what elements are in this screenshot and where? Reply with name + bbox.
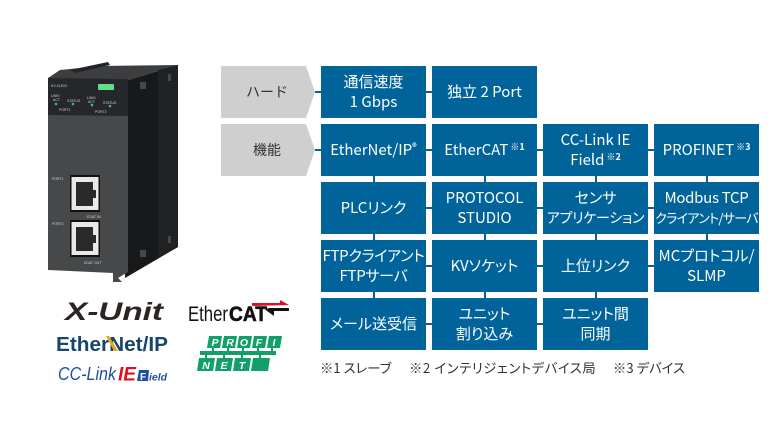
box: Modbus TCP (654, 182, 759, 234)
box: unit interrupt: 割り込み (456, 323, 513, 344)
logo: PROFINET: O (240, 337, 248, 349)
logo: EtherNet/IP: EtherNet/IP (56, 333, 168, 356)
box: mail send and receive: メール送受信 (330, 313, 417, 334)
box: PROTOCOL STUDIO: PROTOCOL (446, 187, 523, 208)
category arrow: hardware (221, 66, 315, 118)
logo: PROFINET: E (220, 360, 228, 372)
box: PLC link: PLCリンク (341, 197, 406, 218)
product photo: X-Unit module: ACT (88, 100, 96, 104)
box: Modbus TCP: クライアント/サーバ (655, 208, 758, 227)
box: inter-unit sync: 同期 (580, 323, 610, 344)
box: communication speed: 通信速度 (343, 71, 404, 92)
box: inter-unit sync: ユニット間 (562, 303, 629, 324)
box: PLC link (321, 182, 426, 234)
box: host link: 上位リンク (561, 255, 630, 276)
product photo: X-Unit module: STATUS (103, 101, 117, 105)
logo: CC-Link IE Field: F (140, 372, 146, 383)
logo: CC-Link IE Field: CC-Link (58, 363, 118, 384)
box: host link (543, 240, 648, 292)
product photo: X-Unit module: EDAT IN (87, 215, 101, 219)
logo: CC-Link IE Field: ield (149, 372, 168, 384)
logo: EtherCAT (188, 300, 289, 324)
logo: PROFINET: P (211, 337, 219, 349)
box: sensor application: センサ (575, 187, 616, 208)
box: CC-Link IE Field: CC-Link IE (561, 129, 630, 150)
box: Modbus TCP: Modbus TCP (664, 187, 748, 208)
box: PROTOCOL STUDIO (432, 182, 537, 234)
footnote: ※3 デバイス (613, 358, 685, 377)
footnote: ※2 インテリジェントデバイス局 (409, 358, 596, 377)
product photo: X-Unit module: PORT1 (59, 108, 71, 112)
box: KV socket (432, 240, 537, 292)
box: independent 2 port (432, 66, 537, 118)
logo: PROFINET: T (239, 360, 247, 372)
box: independent 2 port: 独立 2 Port (447, 81, 522, 102)
product photo: X-Unit module: LINK/ (51, 94, 60, 98)
box: PROFINET (654, 124, 759, 176)
box: communication speed (321, 66, 426, 118)
footnote (320, 358, 685, 377)
box: FTP client and server (321, 240, 426, 292)
footnote: ※1 スレーブ (320, 358, 391, 377)
product photo: X-Unit module (48, 62, 178, 282)
product photo: X-Unit module: PORT2 (95, 110, 107, 114)
box: unit interrupt (432, 298, 537, 350)
box: KV socket: KVソケット (451, 255, 518, 276)
product photo: X-Unit module: EDAT OUT (84, 261, 102, 265)
product photo: X-Unit module: LINK/ (87, 96, 96, 100)
logo: PROFINET: F (256, 337, 263, 349)
product photo: X-Unit module: ACT (53, 98, 61, 102)
box: communication speed: 1 Gbps (350, 91, 397, 112)
box: EtherNet/IP (321, 124, 426, 176)
logo: PROFINET: I (273, 337, 277, 349)
category arrow: functions (221, 124, 315, 176)
product photo: X-Unit module: STATUS (67, 99, 81, 103)
logo: CC-Link IE Field (58, 363, 168, 384)
box: MC protocol / SLMP: SLMP (687, 265, 726, 286)
box: sensor application: アプリケーション (547, 208, 644, 228)
box: unit interrupt: ユニット (459, 303, 510, 324)
box: PROFINET: PROFINET※3 (663, 139, 750, 160)
box: inter-unit sync (543, 298, 648, 350)
box: MC protocol / SLMP: MCプロトコル/ (659, 245, 754, 266)
box: FTP client and server: FTPサーバ (340, 265, 407, 286)
logo: X-Unit: X-Unit (62, 298, 165, 326)
category arrow: hardware: ハード (246, 82, 288, 102)
box: CC-Link IE Field (543, 124, 648, 176)
box: EtherCAT: EtherCAT※1 (444, 139, 525, 160)
category arrow: functions: 機能 (253, 140, 281, 160)
box: MC protocol / SLMP (654, 240, 759, 292)
box: EtherCAT (432, 124, 537, 176)
box: sensor application (543, 182, 648, 234)
logo: PROFINET: N (202, 360, 210, 372)
logo: PROFINET: R (226, 337, 234, 349)
product photo: X-Unit module: KV-XLE02 (51, 84, 67, 88)
box: EtherNet/IP: EtherNet/IP® (330, 139, 417, 160)
box: FTP client and server: FTPクライアント (323, 245, 424, 266)
product photo: X-Unit module: PORT2 (52, 222, 64, 226)
box: PROTOCOL STUDIO: STUDIO (457, 207, 512, 228)
box: CC-Link IE Field: Field※2 (570, 149, 621, 170)
logo: PROFINET (197, 336, 282, 372)
product photo: X-Unit module: PORT1 (52, 177, 64, 181)
box: mail send and receive (321, 298, 426, 350)
